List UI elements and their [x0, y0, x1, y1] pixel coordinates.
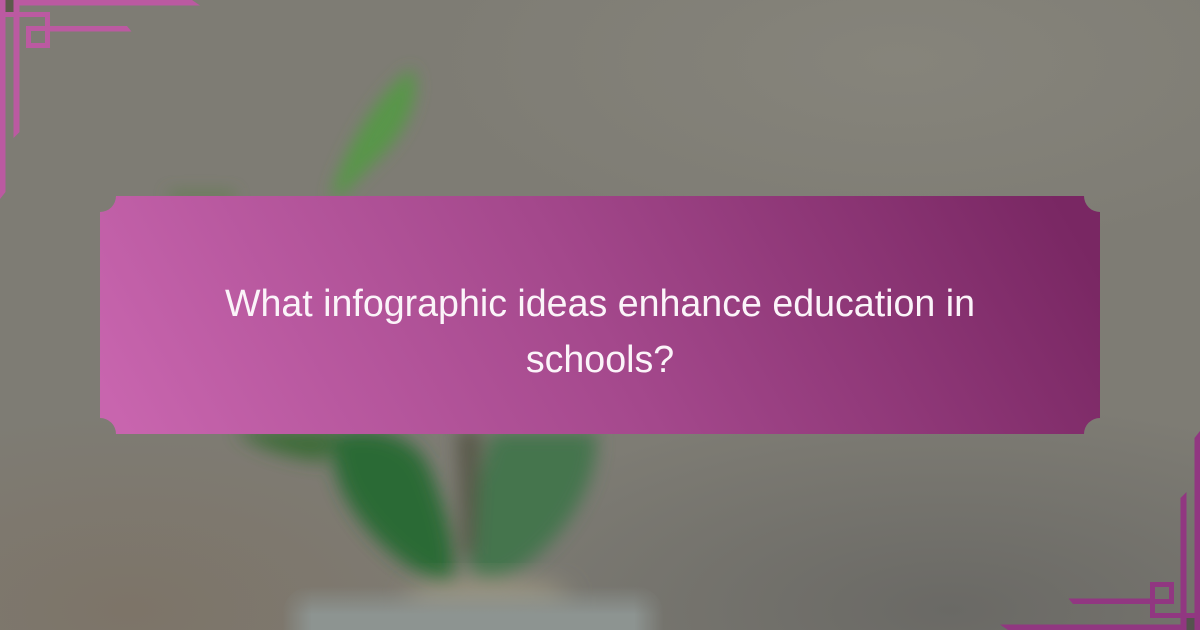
bottom-right corner ornament	[1000, 431, 1200, 630]
title: What infographic ideas enhance education in schools?	[225, 282, 975, 380]
top-left corner ornament	[0, 0, 200, 199]
